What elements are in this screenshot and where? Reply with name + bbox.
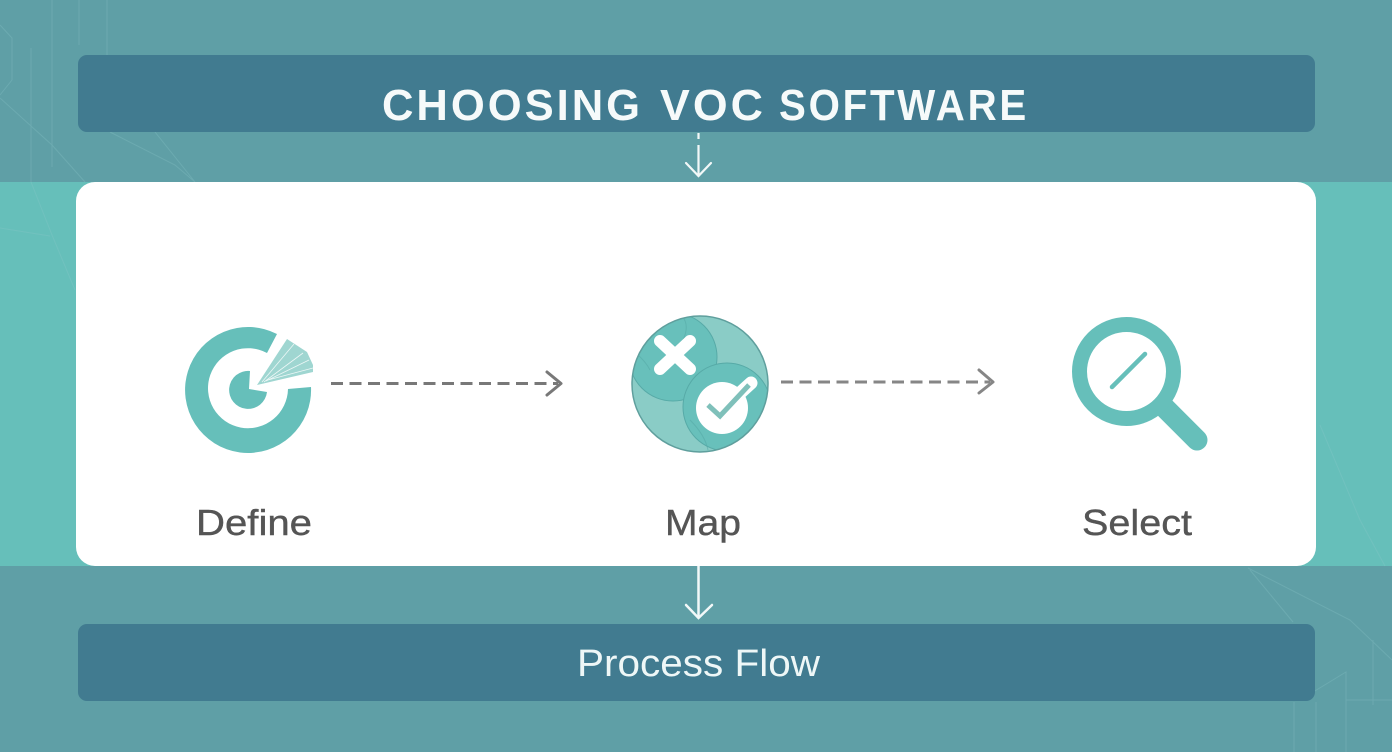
- icon: target with fan: [185, 327, 313, 453]
- title: [382, 81, 1029, 130]
- icon: map with cross and check: [629, 313, 771, 452]
- panel: process steps: [76, 182, 1316, 566]
- arrow: define to map: [331, 372, 561, 395]
- label: map: Map: [665, 502, 741, 543]
- icon: check badge: [696, 382, 751, 434]
- icon: cross: [660, 341, 690, 369]
- footer label: Process Flow: [577, 643, 821, 685]
- title: VOC: [660, 81, 766, 130]
- footer bar: [78, 624, 1315, 701]
- icon: magnifying glass: [1080, 324, 1197, 440]
- title: CHOOSING: [382, 81, 643, 130]
- header bar: [78, 55, 1315, 132]
- title: SOFTWARE: [779, 81, 1029, 130]
- arrow: title to panel: [686, 133, 711, 176]
- arrow: panel to footer: [686, 566, 712, 618]
- label: select: Select: [1082, 502, 1192, 543]
- label: define: Define: [196, 502, 312, 543]
- arrow: map to select: [781, 370, 993, 393]
